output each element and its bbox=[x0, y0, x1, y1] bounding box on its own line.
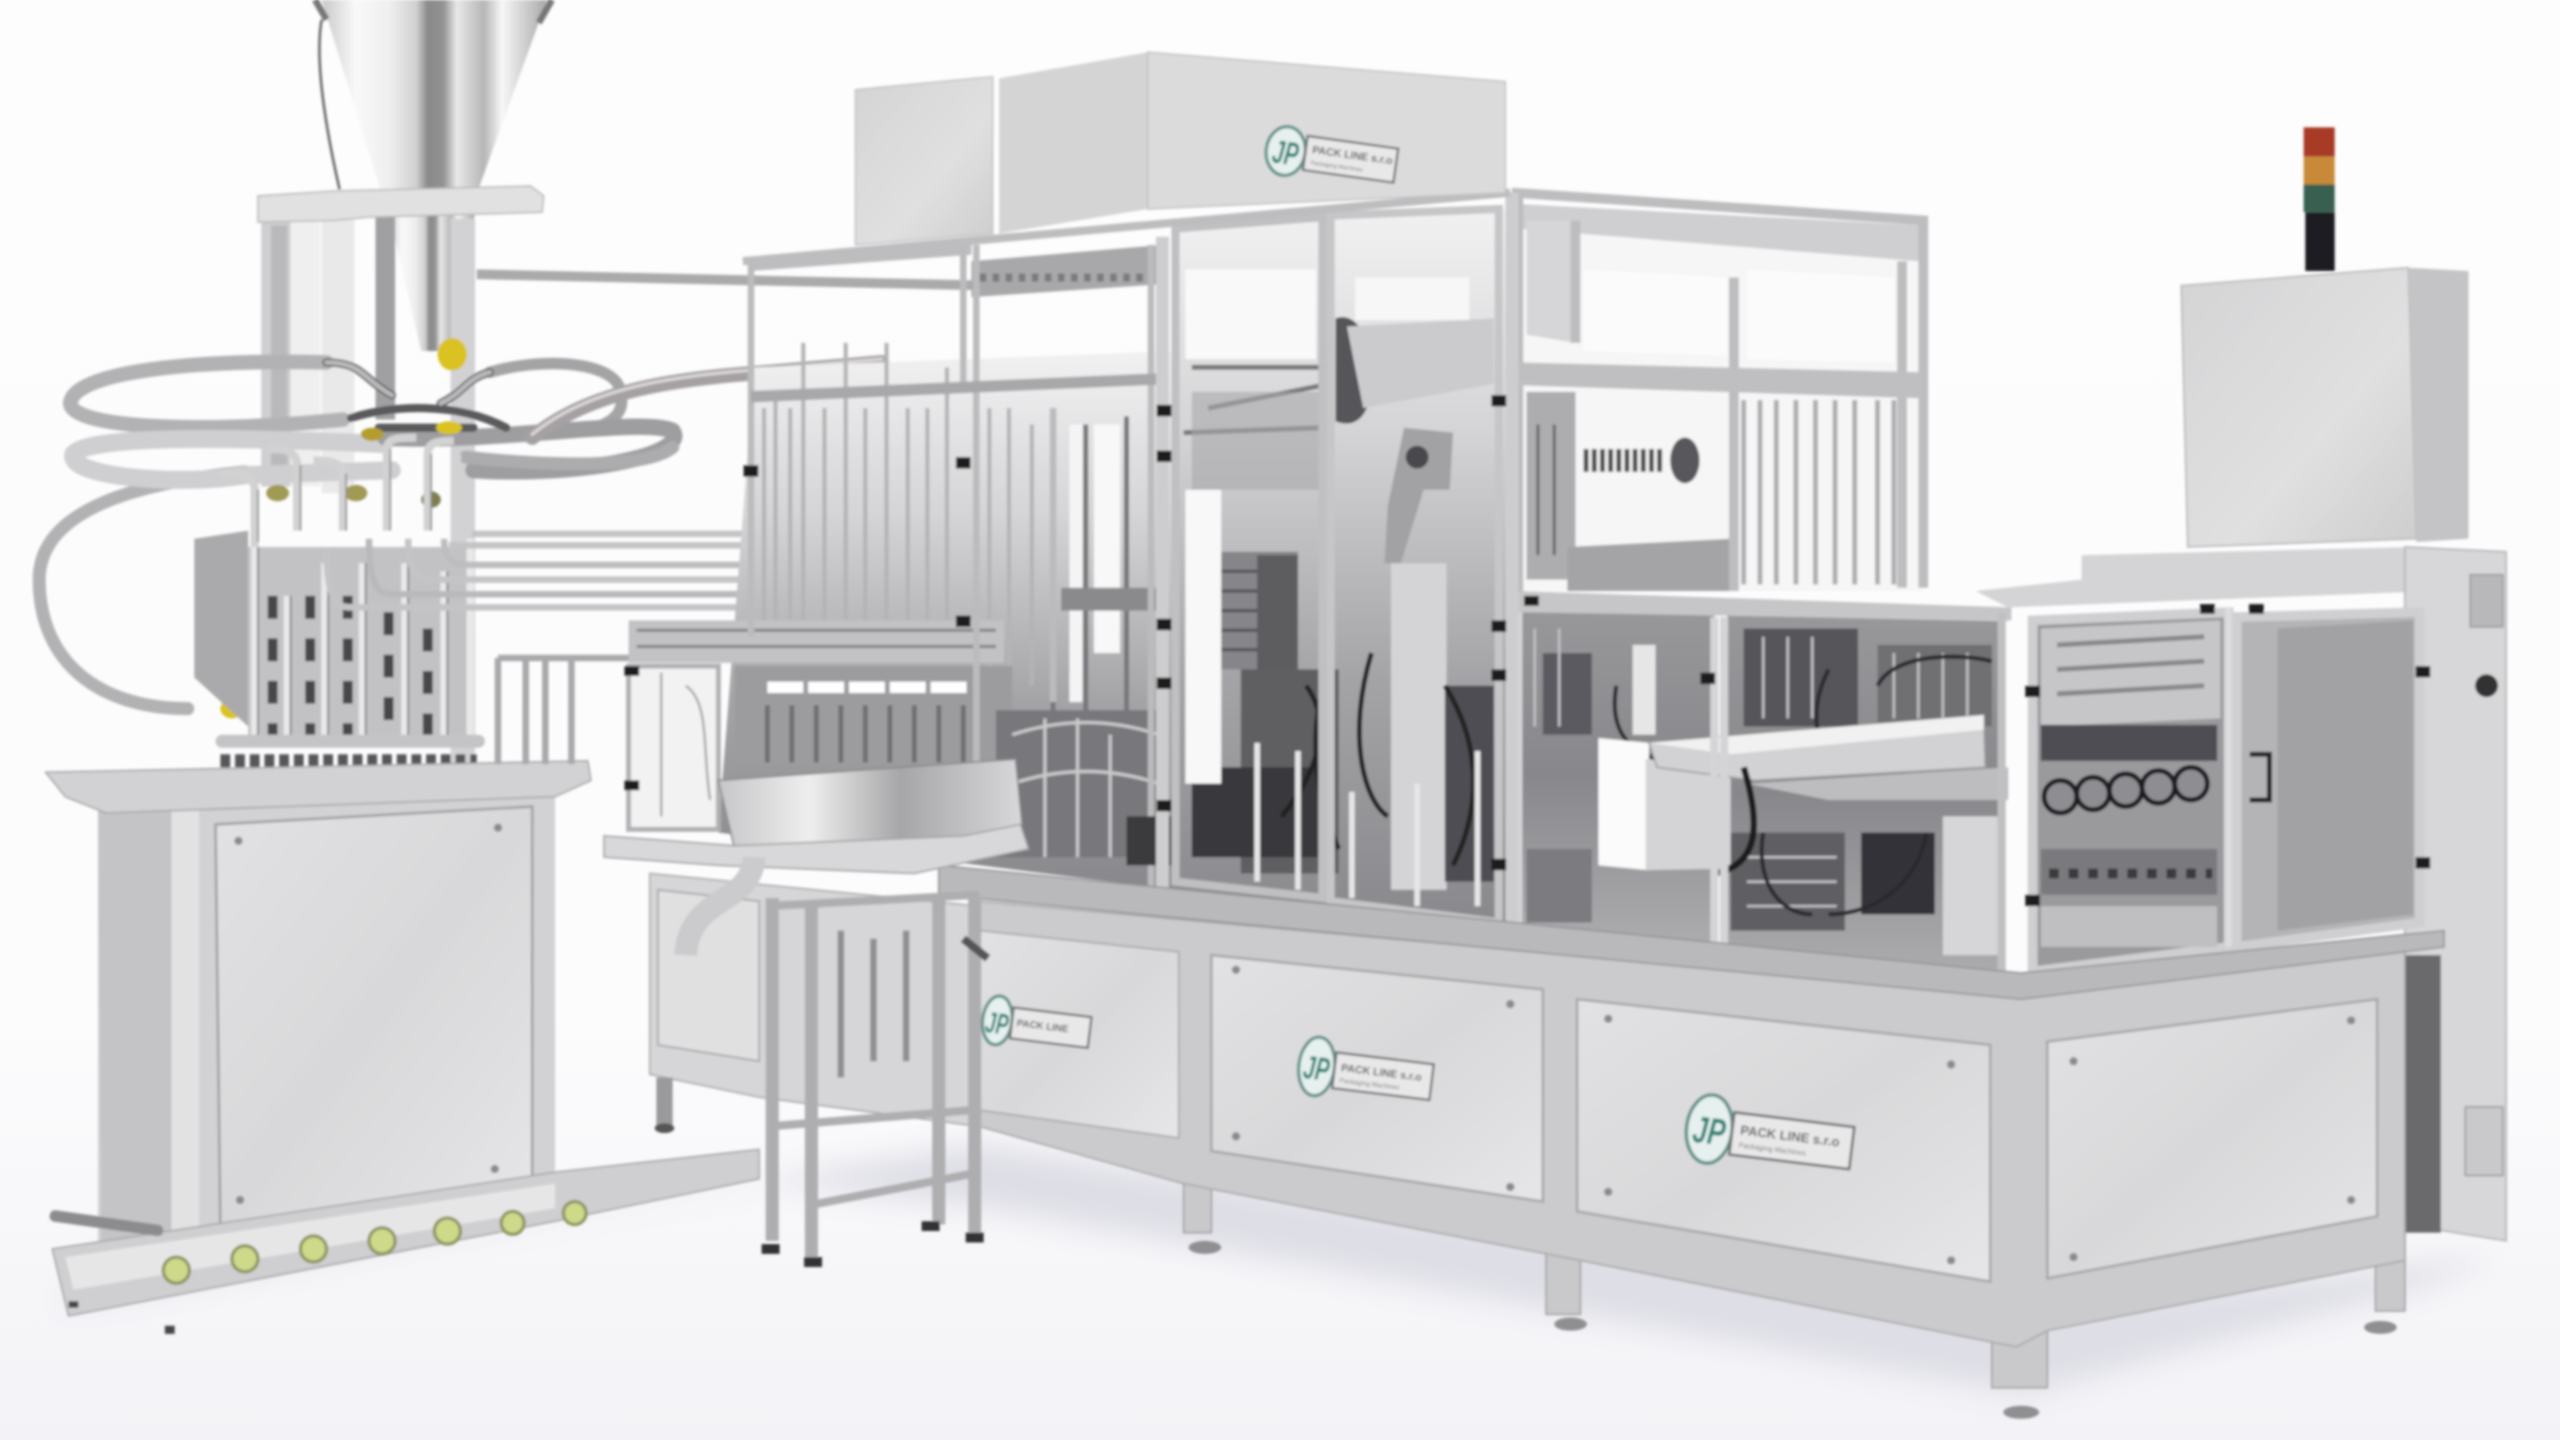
logo panel B bbox=[1295, 1035, 1435, 1110]
vertical rods bbox=[764, 343, 1032, 686]
right upper enclosure bbox=[1512, 193, 1923, 596]
roll of film bbox=[1336, 317, 1372, 424]
filler heads bbox=[629, 620, 1004, 663]
capper rollers bbox=[2041, 725, 2217, 761]
base body bbox=[980, 901, 2405, 1347]
floor shadow bbox=[65, 1143, 2498, 1396]
green caps bbox=[163, 1202, 586, 1283]
right electrical box bbox=[2181, 127, 2469, 547]
panel B bbox=[1211, 955, 1543, 1202]
valve top bbox=[438, 338, 467, 371]
small box bbox=[856, 77, 993, 245]
panel D bbox=[2047, 999, 2377, 1278]
logo panel C: JP bbox=[1690, 1108, 1729, 1154]
black hinges bbox=[632, 395, 2423, 906]
cables bbox=[1282, 653, 1473, 865]
top boxes bbox=[856, 52, 1505, 245]
logo panel B: Packaging Machines bbox=[1339, 1077, 1400, 1092]
vent top bbox=[2470, 575, 2503, 627]
valve on plate bbox=[216, 536, 242, 555]
hopper cone bbox=[322, 0, 547, 189]
frame bbox=[1518, 598, 2008, 980]
pipe stub bbox=[49, 1210, 164, 1237]
upper windows bbox=[1584, 269, 1727, 356]
right platform bbox=[1976, 547, 2436, 607]
logo top: PACK LINE s.r.o bbox=[1311, 144, 1394, 167]
signal tower bbox=[2304, 127, 2335, 271]
cabinet door panel bbox=[216, 807, 532, 1228]
vertical bars bbox=[1257, 743, 1478, 906]
rail body bbox=[52, 1149, 759, 1316]
white ring bbox=[73, 439, 392, 480]
valve left bbox=[361, 428, 384, 441]
enclosure interior 2 bbox=[1727, 612, 2005, 976]
logo top bbox=[1263, 124, 1399, 191]
logo panel B: PACK LINE s.r.o bbox=[1340, 1062, 1423, 1084]
box left face bbox=[2181, 268, 2416, 547]
door right bbox=[2237, 612, 2420, 947]
deck bbox=[939, 865, 2444, 999]
stand bbox=[767, 895, 980, 1257]
lower right enclosure bbox=[1518, 591, 2011, 980]
interior left bbox=[718, 351, 1176, 890]
door left upper light bbox=[2041, 620, 2220, 727]
legs bbox=[1184, 1127, 2405, 1388]
white windows bbox=[1069, 424, 1082, 702]
dark coils bbox=[273, 596, 428, 735]
left lower enclosure base bbox=[650, 873, 980, 1133]
door left bbox=[2033, 612, 2229, 971]
support frame bbox=[258, 186, 996, 774]
central interior bbox=[1172, 209, 1510, 931]
panel C bbox=[1577, 999, 1990, 1282]
logo panel A: JP bbox=[984, 1006, 1010, 1042]
stand feet bbox=[771, 1221, 975, 1267]
backing bbox=[248, 547, 473, 743]
cabinet top bbox=[46, 761, 591, 813]
rear base foot bbox=[656, 1078, 673, 1127]
lever bbox=[963, 939, 988, 958]
white box bbox=[1598, 738, 1649, 870]
rear base panel bbox=[658, 890, 759, 1061]
left cartridge bbox=[1527, 392, 1576, 580]
logo panel A: PACK LINE bbox=[1016, 1018, 1069, 1035]
yellow valves bbox=[216, 338, 467, 718]
hopper rim bbox=[315, 0, 552, 23]
top rails bbox=[743, 242, 971, 271]
knob bbox=[2475, 674, 2498, 697]
long hose to filler bbox=[532, 362, 882, 438]
lower cone bbox=[389, 212, 475, 351]
hoses bbox=[39, 359, 882, 709]
dark components bbox=[1744, 629, 1858, 727]
upper U tubes bbox=[220, 438, 457, 547]
column body bbox=[2405, 547, 2506, 1241]
logo panel C: PACK LINE s.r.o bbox=[1740, 1123, 1840, 1150]
right ring bbox=[385, 427, 674, 471]
cabinet side bbox=[98, 808, 176, 1260]
logo top: JP bbox=[1270, 132, 1301, 173]
lower loop hose bbox=[39, 472, 245, 709]
foot pads bbox=[1189, 1241, 2397, 1419]
linkage arm bbox=[1384, 428, 1453, 563]
top plate bbox=[258, 186, 544, 222]
central door interior bbox=[1127, 209, 1510, 931]
back right ring bbox=[490, 363, 622, 433]
valves on tubes bbox=[266, 485, 289, 501]
manifold dark connections bbox=[327, 362, 506, 428]
bars bbox=[1744, 400, 1894, 584]
horizontal rail to enclosure bbox=[477, 269, 996, 291]
valve middle bbox=[436, 421, 462, 434]
small rack behind cabinet bbox=[498, 658, 694, 764]
left cabinet bbox=[46, 761, 591, 1260]
hopper cable bbox=[319, 20, 340, 189]
logo panel C: Packaging Machines bbox=[1738, 1140, 1807, 1158]
logo top: Packaging Machines bbox=[1310, 160, 1363, 174]
large box front bbox=[999, 52, 1148, 233]
rear frame posts bbox=[261, 209, 291, 487]
frame members bbox=[1512, 193, 1923, 596]
screw shaft bbox=[1584, 453, 1665, 467]
horizontal product pipes bbox=[327, 534, 955, 607]
white windows upper bbox=[1185, 269, 1316, 359]
dark central blocks bbox=[1208, 552, 1298, 669]
tray front bbox=[604, 824, 1029, 873]
main glass doors bbox=[743, 193, 1512, 931]
logo panel A bbox=[980, 994, 1093, 1056]
outlet pipe bbox=[686, 857, 754, 955]
box right face bbox=[2408, 268, 2469, 542]
main base cabinet bbox=[939, 865, 2444, 1419]
hopper assembly bbox=[315, 0, 552, 351]
white window bbox=[1185, 490, 1221, 784]
conveyor arm bbox=[1649, 715, 1985, 780]
hopper tray and stand bbox=[604, 759, 1029, 1267]
dark recess bbox=[2405, 955, 2441, 1233]
black cable bbox=[1714, 767, 1754, 873]
pipe rail base bbox=[49, 1149, 759, 1334]
enclosure interior 1 bbox=[1518, 607, 1714, 944]
panel A bbox=[980, 931, 1179, 1138]
tube bank bbox=[216, 438, 485, 761]
middle glass interior bbox=[629, 242, 1176, 890]
logo panel B: JP bbox=[1301, 1048, 1332, 1088]
tray back bbox=[718, 759, 1022, 849]
panel screws bbox=[1236, 970, 2351, 1260]
door frames bbox=[1176, 217, 1322, 898]
rear base bbox=[650, 873, 980, 1127]
top edge bbox=[743, 193, 1510, 261]
logo panel C bbox=[1682, 1092, 1856, 1181]
valve bottom bbox=[220, 699, 243, 718]
right door enclosure bbox=[2033, 607, 2420, 971]
heat exchanger plate bbox=[194, 531, 248, 727]
cabinet front bbox=[98, 787, 555, 1260]
vent bottom bbox=[2465, 1107, 2503, 1176]
vertical tubes bbox=[255, 539, 470, 743]
bottom header bbox=[216, 735, 485, 748]
tall right column bbox=[2405, 547, 2506, 1241]
door handles bbox=[2250, 754, 2269, 800]
upper interior bbox=[1518, 204, 1923, 591]
large box face bbox=[1148, 52, 1505, 209]
cabinet screws bbox=[238, 828, 498, 1200]
busy details bbox=[1535, 629, 1967, 906]
rail feet bbox=[73, 1301, 170, 1334]
upper left ring bbox=[70, 362, 343, 427]
